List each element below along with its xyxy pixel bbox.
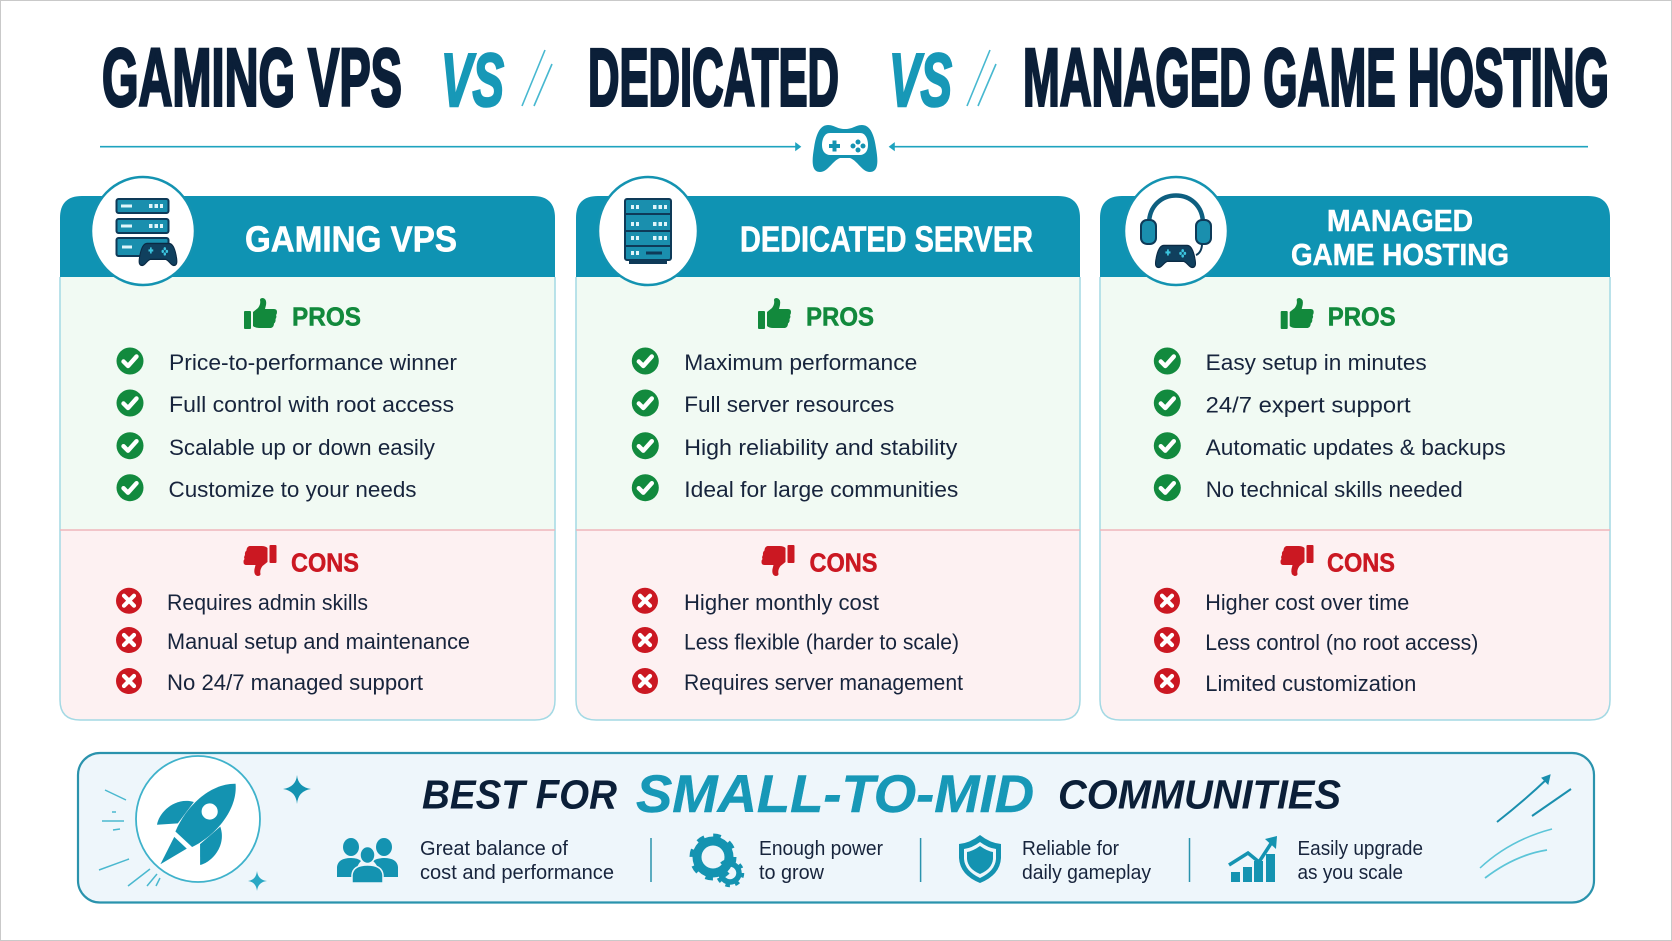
heading: GAME HOSTING: [1291, 237, 1509, 272]
feature text: Great balance of: [420, 837, 568, 860]
heading: MANAGED: [1327, 203, 1473, 238]
pros heading: [758, 298, 874, 332]
con item: Less flexible (harder to scale): [684, 630, 959, 654]
icon: server rack: [598, 177, 698, 285]
icon: gears: [692, 836, 742, 886]
title: DEDICATED: [588, 32, 839, 124]
con item: No 24/7 managed support: [167, 670, 424, 695]
con item: Higher monthly cost: [684, 590, 880, 615]
heading: [422, 765, 1341, 824]
pro item: Full server resources: [684, 392, 894, 417]
cons background: [1100, 530, 1610, 720]
header bar: [576, 196, 1080, 277]
pro item: Price-to-performance winner: [169, 350, 458, 375]
pros background: [576, 277, 1080, 530]
cons heading: [244, 545, 359, 578]
icon: server with gamepad: [91, 177, 195, 285]
pro item: [1154, 390, 1411, 418]
cons background: [60, 530, 555, 720]
title: [102, 32, 1609, 124]
con item: Higher cost over time: [1205, 590, 1409, 615]
title: VS: [889, 38, 952, 122]
icon: gamepad: [813, 125, 877, 172]
con item: Requires admin skills: [167, 590, 368, 615]
heading: GAMING VPS: [245, 218, 457, 260]
cons heading: CONS: [1327, 548, 1395, 578]
pro item: Customize to your needs: [168, 477, 416, 502]
feature text: Reliable for: [1022, 837, 1119, 860]
panel: dedicated server: [576, 177, 1080, 720]
con item: Manual setup and maintenance: [167, 629, 470, 654]
title rule left: [100, 144, 800, 150]
feature text: daily gameplay: [1022, 861, 1152, 884]
pro item: Automatic updates & backups: [1206, 435, 1506, 460]
cons heading: CONS: [810, 548, 878, 578]
pros heading: PROS: [292, 302, 361, 332]
pros heading: [1281, 298, 1396, 332]
cons heading: CONS: [291, 548, 359, 578]
heading: BEST FOR: [422, 772, 617, 818]
icon: motion arrows: [1480, 775, 1571, 878]
pro item: High reliability and stability: [684, 435, 958, 460]
icon: headset with gamepad: [1124, 177, 1228, 285]
panel: managed game hosting: [1100, 177, 1610, 720]
cons heading: [1280, 545, 1395, 578]
title rule right: [890, 144, 1588, 150]
panel: best for banner: [78, 753, 1594, 902]
header bar: [1100, 196, 1610, 277]
pro item: Ideal for large communities: [684, 477, 958, 502]
con item: Limited customization: [1205, 671, 1416, 696]
heading: DEDICATED SERVER: [740, 218, 1033, 260]
pro item: Easy setup in minutes: [1206, 350, 1427, 375]
feature text: Enough power: [759, 837, 883, 860]
pros heading: [244, 298, 361, 332]
icon: sparkle: [283, 775, 311, 804]
title: GAMING VPS: [102, 32, 402, 124]
header bar: [60, 196, 555, 277]
feature text: as you scale: [1298, 861, 1403, 884]
pros background: [60, 277, 555, 530]
icon: rocket: [99, 756, 260, 887]
feature text: [420, 837, 614, 884]
feature text: [759, 837, 883, 884]
pros background: [1100, 277, 1610, 530]
cons heading: [762, 545, 878, 578]
heading: COMMUNITIES: [1058, 772, 1341, 818]
feature text: to grow: [759, 861, 824, 884]
feature text: [1298, 837, 1423, 884]
heading: [1291, 203, 1509, 272]
icon: shield: [959, 835, 1001, 883]
feature text: cost and performance: [420, 861, 614, 884]
icon: sparkle: [248, 871, 267, 891]
pro item: Scalable up or down easily: [169, 435, 436, 460]
title: VS: [441, 38, 504, 122]
panel: gaming vps: [60, 177, 555, 720]
pro item: 24/7 expert support: [1206, 392, 1411, 418]
cons background: [576, 530, 1080, 720]
heading: SMALL-TO-MID: [636, 765, 1034, 824]
feature text: Easily upgrade: [1298, 837, 1423, 860]
pros heading: PROS: [806, 302, 874, 332]
feature text: [1022, 837, 1152, 884]
pros heading: PROS: [1328, 302, 1396, 332]
icon: people: [337, 838, 398, 883]
con item: Requires server management: [684, 670, 964, 695]
pro item: Full control with root access: [169, 392, 454, 417]
icon: growth chart: [1229, 836, 1277, 882]
con item: Less control (no root access): [1205, 630, 1478, 655]
pro item: Maximum performance: [684, 350, 917, 375]
pro item: No technical skills needed: [1206, 477, 1463, 502]
